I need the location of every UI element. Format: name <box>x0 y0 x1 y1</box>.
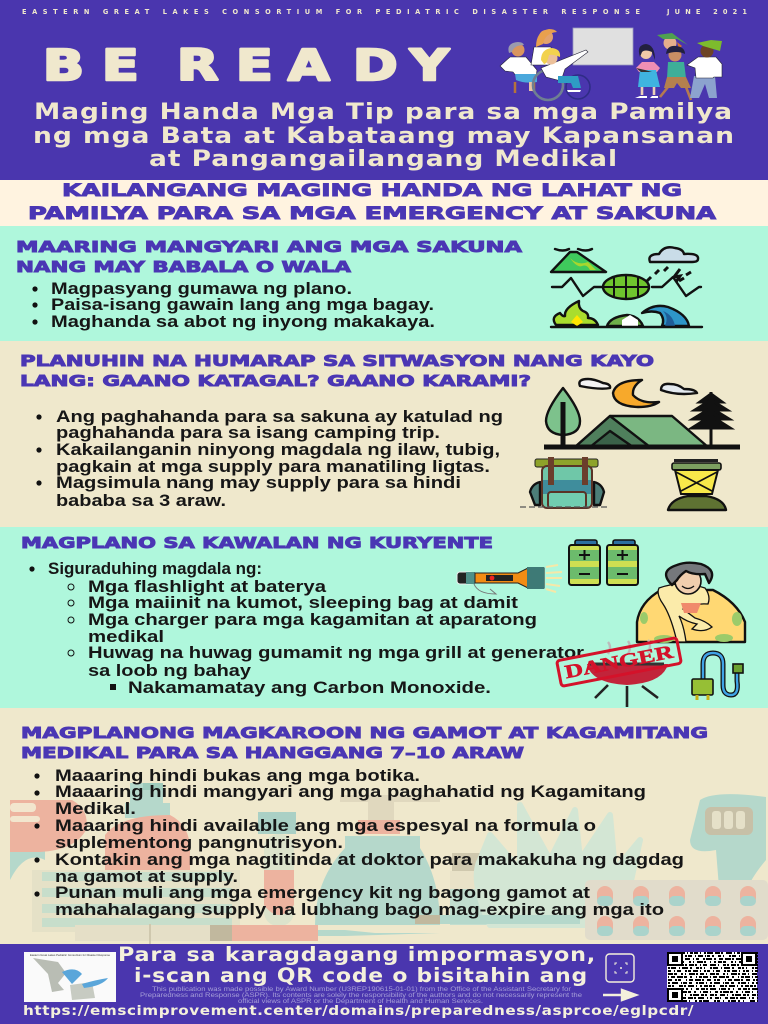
icon: flashlight <box>457 565 562 594</box>
bullet list: Magpasyang gumawa ng plano. <box>51 280 352 298</box>
faded medical supplies background <box>10 783 768 944</box>
pump bottle <box>315 795 440 925</box>
bullet list: medikal <box>88 628 164 646</box>
website URL: https://emscimprovement.center/domains/preparedness/asprcoe/eglpcdr/ <box>23 1003 694 1019</box>
panel: main heading: PAMILYA PARA SA MGA EMERGENCY AT SAKUNA <box>28 204 717 224</box>
bullet list: Magsimula nang may supply para sa hindi <box>56 474 461 492</box>
map of the Great Lakes region: Eastern Great Lakes Pediatric Consortium for Disaster Response <box>30 953 110 957</box>
bullet list: Nakamamatay ang Carbon Monoxide. <box>128 679 491 697</box>
bullet list: Siguraduhing magdala ng: <box>48 560 262 578</box>
man with white shirt <box>687 40 722 98</box>
vial <box>450 853 500 925</box>
bullet list: Huwag na huwag gumamit ng mga grill at generator <box>88 644 585 662</box>
subtitle <box>33 100 735 172</box>
icon: pine tree <box>692 392 730 447</box>
heading <box>21 724 708 762</box>
funding disclaimer: This publication was made possible by Award Number (U3REP190615-01-01) from the Office of the Assistant Secretary for <box>152 986 571 993</box>
icon: volcano <box>551 249 606 272</box>
bullet list: Mga charger para mga kagamitan at aparatong <box>88 611 537 629</box>
subtitle: Maging Handa Mga Tip para sa mga Pamilya <box>34 100 733 125</box>
icon: person wrapped in blanket <box>637 563 745 643</box>
panel: medicines <box>0 708 768 944</box>
bullet list: na gamot at supply. <box>55 868 238 886</box>
panel: header <box>0 0 768 180</box>
organisation line: JUNE 2021 <box>666 8 747 16</box>
bullet list: sa loob ng bahay <box>88 662 252 680</box>
arrow <box>603 990 636 1000</box>
boy with teal shirt <box>660 46 691 100</box>
bullet list: mahahalagang supply na lubhang bago mag-expire ang mga ito <box>55 901 664 919</box>
funding disclaimer <box>140 986 583 1005</box>
bullet list: bababa sa 3 araw. <box>56 492 226 510</box>
bullet list: Kakailanganin ninyong magdala ng ilaw, tubig, <box>56 441 500 459</box>
bullet list: Ang paghahanda para sa sakuna ay katulad ng <box>56 408 503 426</box>
icon: grill with danger stamp <box>557 638 681 707</box>
icon: grill with danger stamp: DANGER <box>563 642 675 683</box>
surgical mask <box>32 870 240 932</box>
test tube <box>258 812 296 926</box>
standing person behind <box>531 29 557 65</box>
bullet list: Maaaring hindi available ang mga espesyal na formula o <box>55 817 596 835</box>
organisation line: EASTERN GREAT LAKES CONSORTIUM FOR PEDIATRIC DISASTER RESPONSE <box>22 8 640 16</box>
icon: natural disasters <box>551 247 702 327</box>
funding disclaimer: official views of ASPR or the Department of Health and Human Services. <box>238 998 483 1005</box>
blister pack of pills <box>585 880 768 940</box>
icon: batteries <box>569 540 638 585</box>
heading <box>16 238 523 276</box>
heading: NANG MAY BABALA O WALA <box>16 258 352 276</box>
icon: storm cloud <box>647 247 698 282</box>
heading <box>20 352 654 390</box>
heading: MAGPLANO SA KAWALAN NG KURYENTE <box>21 534 493 552</box>
bullet list: Punan muli ang mga emergency kit ng bagong gamot at <box>55 884 591 902</box>
girl in blue dress <box>635 44 660 98</box>
man with green hat behind <box>657 33 688 50</box>
heading: LANG: GAANO KATAGAL? GAANO KARAMI? <box>20 372 531 390</box>
heading: PLANUHIN NA HUMARAP SA SITWASYON NANG KAYO <box>20 352 654 370</box>
panel: disasters <box>0 226 768 341</box>
bullet list: Mga maiinit na kumot, sleeping bag at damit <box>88 594 519 612</box>
panel: main heading: KAILANGANG MAGING HANDA NG LAHAT NG <box>62 181 682 201</box>
bullet list <box>32 280 435 331</box>
icon: tree <box>546 388 580 447</box>
QR code <box>667 952 758 1002</box>
subtitle: at Pangangailangang Medikal <box>149 147 618 172</box>
panel: footer <box>0 943 768 1024</box>
bullet list: Medikal. <box>55 800 136 818</box>
bullet list: Maaaring hindi bukas ang mga botika. <box>55 767 420 785</box>
panel: camping plan <box>0 341 768 527</box>
icon: phone scanning <box>606 954 634 982</box>
person on chair <box>500 42 537 93</box>
call to action <box>118 943 596 987</box>
left bandage shape <box>10 800 87 880</box>
icon: wildfire <box>554 301 598 326</box>
bullet list: Maaaring hindi mangyari ang mga paghahatid ng Kagamitang <box>55 783 646 801</box>
illustration: group of people with whiteboard <box>500 28 722 100</box>
bullet list: Paisa-isang gawain lang ang mga bagay. <box>51 296 434 314</box>
funding disclaimer: Preparedness and Response (ASPR). Its contents are solely the responsibility of the authors and do not necessarily represent the <box>140 992 583 999</box>
call to action: i-scan ang QR code o bisitahin ang <box>134 964 588 987</box>
icon: crescent moon <box>613 380 659 407</box>
icon: tsunami wave <box>642 306 689 326</box>
bullet list: Kontakin ang mga nagtitinda at doktor para makakuha ng dagdag <box>55 851 684 869</box>
bullet list <box>29 560 585 697</box>
icon: lantern <box>668 459 726 510</box>
bullet list: paghahanda para sa isang camping trip. <box>56 424 440 442</box>
icon: camping scene <box>544 379 740 447</box>
heading: MEDIKAL PARA SA HANGGANG 7–10 ARAW <box>21 744 525 762</box>
gloves <box>477 805 640 925</box>
person in wheelchair <box>533 48 590 100</box>
panel: main heading <box>0 180 768 226</box>
icon: house <box>607 315 643 326</box>
syringes <box>75 915 580 944</box>
bullet list <box>34 767 684 919</box>
bullet list: Maghanda sa abot ng inyong makakaya. <box>51 313 435 331</box>
spray bottle <box>105 783 190 870</box>
bullet list: Mga flashlight at baterya <box>88 578 327 596</box>
icon: backpack <box>520 457 610 508</box>
QR finder patterns <box>668 953 756 1001</box>
icon: power cord <box>692 653 743 700</box>
bullet list <box>36 408 503 510</box>
blood pressure device <box>690 794 766 900</box>
icon: clouds <box>579 379 697 394</box>
bullet list: suplementong pangnutrisyon. <box>55 834 343 852</box>
panel: power outage <box>0 527 768 708</box>
heading: MAARING MANGYARI ANG MGA SAKUNA <box>16 238 523 256</box>
subtitle: ng mga Bata at Kabataang may Kapansanan <box>33 124 735 149</box>
bullet list: pagkain at mga supply para manatiling ligtas. <box>56 458 490 476</box>
title: BE READY <box>43 41 450 91</box>
call to action: Para sa karagdagang impormasyon, <box>118 943 596 966</box>
map of the Great Lakes region <box>24 952 116 1002</box>
icon: tent <box>544 416 740 447</box>
heading: MAGPLANONG MAGKAROON NG GAMOT AT KAGAMITANG <box>21 724 708 742</box>
icon: earthquake line and globe <box>552 275 701 299</box>
